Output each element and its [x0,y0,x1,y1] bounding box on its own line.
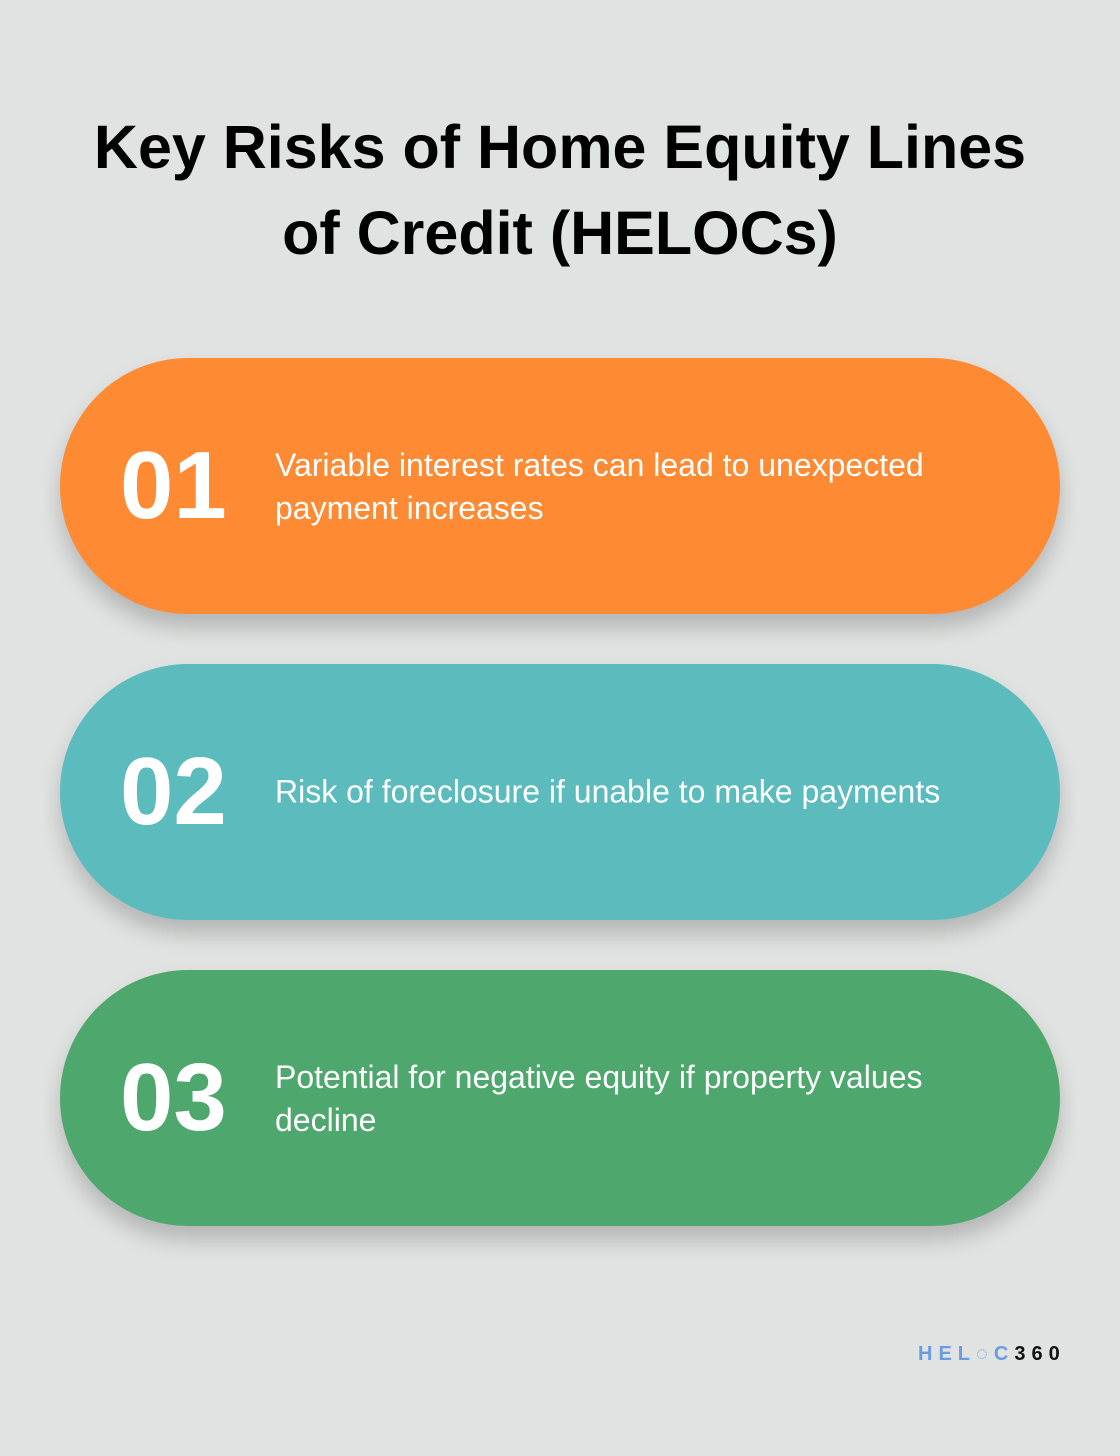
title: of Credit (HELOCs) [282,199,838,267]
title [94,113,1026,267]
text 03: Potential for negative equity if property values decline [275,1059,922,1138]
title: Key Risks of Home Equity Lines [94,113,1026,181]
panel: risk 02 [60,664,1060,920]
text 02: Risk of foreclosure if unable to make payments [275,774,940,810]
number 01: 01 [120,432,227,539]
panel: risk 01 [60,358,1060,614]
text 01: Variable interest rates can lead to unexpected payment increases [275,447,924,526]
logo: HEL◌C360 [918,1343,1066,1365]
panel: risk 03 [60,970,1060,1226]
number 03: 03 [120,1044,227,1151]
number 02: 02 [120,738,227,845]
